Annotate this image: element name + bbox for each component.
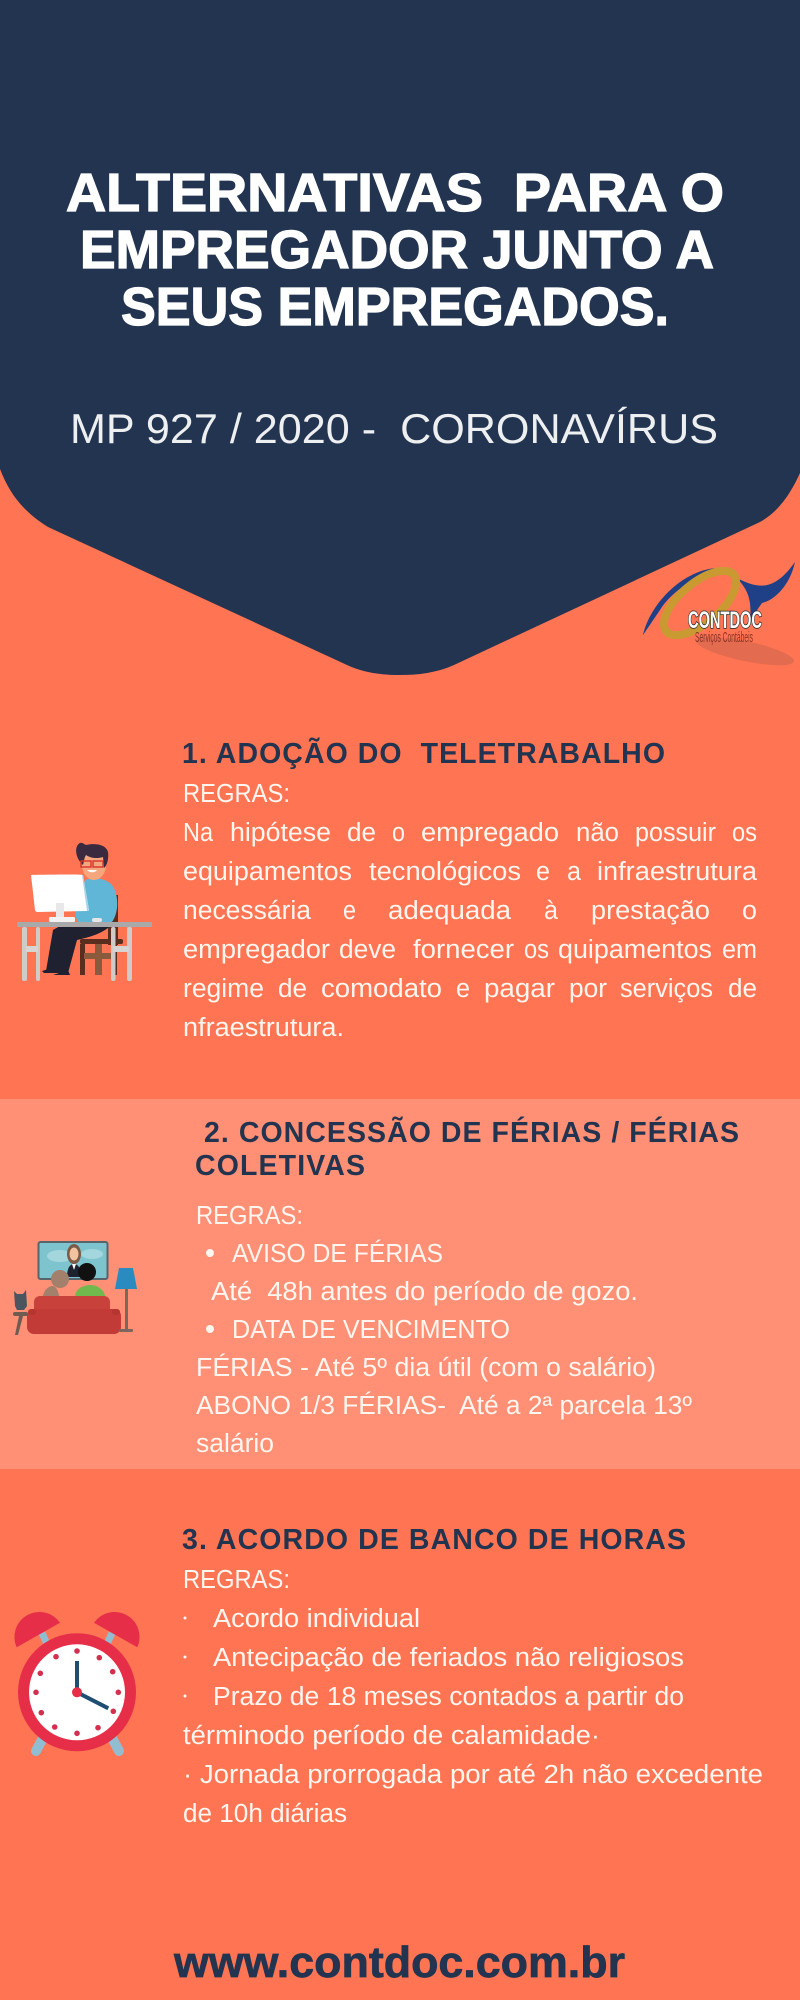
icon: alarm clock — [14, 1612, 140, 1751]
text block: section 1 rules: infraestrutura — [597, 858, 758, 886]
text block: section 1 rules: pagar — [484, 975, 556, 1003]
text block: section 2 rules: ABONO 1/3 FÉRIAS- Até a 2ª parcela 13º — [196, 1391, 692, 1420]
text block: section 1 rules: empregado — [421, 819, 559, 847]
text block: section 1 rules: Na — [183, 819, 214, 847]
text block: section 1 rules — [183, 780, 758, 1042]
text block: section 2 rules: REGRAS: — [196, 1202, 303, 1230]
title: SEUS EMPREGADOS. — [121, 277, 669, 337]
text block: section 2 rules: DATA DE VENCIMENTO — [232, 1316, 510, 1344]
icon: family watching tv — [13, 1242, 137, 1335]
text block: section 1 rules: prestação — [591, 897, 710, 925]
text block: section 1 rules: empregador — [183, 936, 331, 964]
text block: section 1 rules: em — [722, 936, 757, 964]
text block: section 2 rules: FÉRIAS - Até 5º dia útil (com o salário) — [196, 1353, 656, 1382]
heading: section 2 — [195, 1117, 739, 1182]
text block: section 2 rules — [196, 1202, 692, 1458]
text block: section 1 rules: por — [569, 975, 608, 1003]
text block: section 3 rules — [183, 1566, 763, 1828]
text block: section 1 rules: os — [732, 819, 757, 847]
text block: section 1 rules: e — [343, 897, 356, 925]
text block: section 3 rules: Prazo de 18 meses contados a partir do — [213, 1683, 684, 1711]
text block: section 1 rules: o — [742, 897, 757, 925]
text block: section 3 rules: términodo período de calamidade· — [183, 1722, 600, 1750]
text block: section 3 rules: Antecipação de feriados não religiosos — [213, 1644, 684, 1672]
text block: section 1 rules: e — [456, 975, 470, 1003]
heading: section 1: 1. ADOÇÃO DO TELETRABALHO — [182, 738, 665, 770]
subtitle: MP 927 / 2020 - CORONAVÍRUS — [70, 405, 718, 452]
heading: section 3: 3. ACORDO DE BANCO DE HORAS — [182, 1524, 686, 1556]
text block: section 1 rules: hipótese — [230, 819, 331, 847]
text block: section 2 rules: Até 48h antes do período de gozo. — [211, 1278, 638, 1306]
text block: section 1 rules: equipamentos — [183, 858, 352, 886]
text block: section 1 rules: adequada — [388, 897, 512, 925]
text block: section 1 rules: nfraestrutura. — [183, 1014, 344, 1042]
heading: section 2: 2. CONCESSÃO DE FÉRIAS / FÉRIAS — [204, 1117, 739, 1149]
text block: section 1 rules: tecnológicos — [369, 858, 521, 886]
icon: Contdoc logo — [643, 559, 796, 671]
text block: section 1 rules: serviços — [620, 975, 713, 1003]
panel: section 1 teletrabalho — [17, 738, 758, 1042]
title: EMPREGADOR JUNTO A — [80, 220, 714, 280]
text block: section 1 rules: e — [536, 858, 550, 886]
text block: section 1 rules: à — [544, 897, 559, 925]
text block: section 1 rules: de — [347, 819, 376, 847]
text block: section 3 rules: Acordo individual — [213, 1605, 420, 1633]
text block: section 1 rules: não — [576, 819, 619, 847]
text block: section 1 rules: REGRAS: — [183, 780, 290, 808]
text block: section 1 rules: de — [278, 975, 307, 1003]
title: ALTERNATIVAS PARA O — [66, 163, 724, 223]
text block: section 2 rules: salário — [196, 1430, 274, 1458]
text block: section 1 rules: os — [524, 936, 549, 964]
text block: section 1 rules: regime — [183, 975, 264, 1003]
text block: section 1 rules: de — [728, 975, 757, 1003]
text block: section 3 rules: REGRAS: — [183, 1566, 290, 1594]
icon: man at desk — [17, 843, 152, 981]
title — [66, 163, 724, 337]
text block: section 1 rules: necessária — [183, 897, 312, 925]
panel: section 2 ferias band — [0, 1099, 800, 1469]
text block: section 2 rules: AVISO DE FÉRIAS — [232, 1239, 443, 1268]
text block: section 1 rules: deve — [339, 936, 396, 964]
footer website: www.contdoc.com.br — [173, 1938, 625, 1987]
text block: section 1 rules: possuir — [635, 819, 717, 847]
text block: section 1 rules: a — [567, 858, 582, 886]
text block: section 1 rules: comodato — [321, 975, 442, 1003]
text block: section 3 rules: · Jornada prorrogada por até 2h não excedente — [183, 1761, 763, 1789]
panel: section 3 banco de horas — [14, 1524, 763, 1828]
text block: section 1 rules: o — [392, 819, 405, 847]
text block: section 1 rules: quipamentos — [558, 936, 712, 964]
text block: section 3 rules: de 10h diárias — [183, 1800, 347, 1828]
heading: section 2: COLETIVAS — [195, 1150, 365, 1182]
text block: section 1 rules: fornecer — [413, 936, 515, 964]
panel: navy header — [0, 0, 800, 675]
